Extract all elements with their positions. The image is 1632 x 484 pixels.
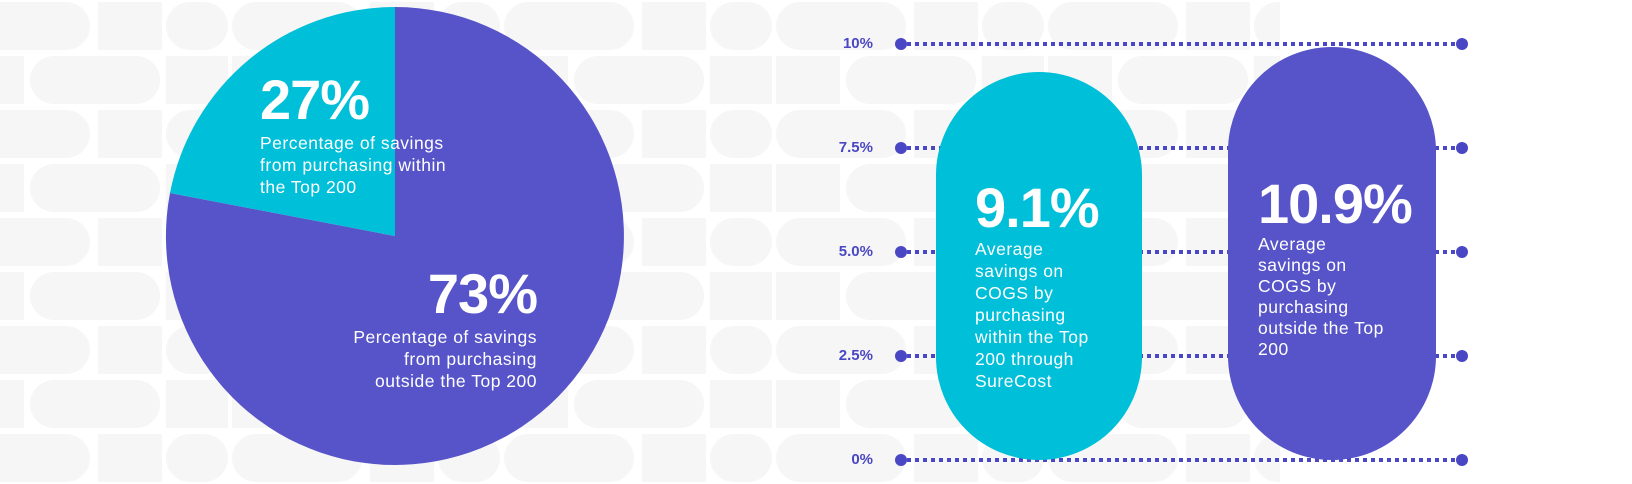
axis labels: 0%	[851, 451, 873, 468]
axis labels: 5.0%	[839, 243, 873, 260]
bar: 10.9%: Average	[1258, 234, 1326, 254]
bar: 9.1%: within the Top	[975, 327, 1089, 347]
bar: 10.9%: savings on	[1258, 255, 1347, 275]
axis labels: 10%	[843, 35, 873, 52]
bar: 9.1%: SureCost	[975, 371, 1052, 391]
pie label 73%	[353, 262, 537, 391]
pie label 27%: 27%	[260, 68, 369, 131]
bar: 10.9%	[1228, 47, 1436, 460]
pie label 73%: 73%	[428, 262, 537, 325]
bar: 9.1%: Average	[975, 239, 1043, 259]
pie label 73%: Percentage of savings	[353, 327, 537, 347]
bar: 9.1%: purchasing	[975, 305, 1066, 325]
bar: 9.1%: savings on	[975, 261, 1064, 281]
pie slice: 73%	[166, 7, 624, 465]
bar: 9.1%	[936, 72, 1142, 460]
pie label 27%: from purchasing within	[260, 155, 446, 175]
pie label 73%: outside the Top 200	[375, 371, 537, 391]
bar: 10.9%: outside the Top	[1258, 318, 1384, 338]
pie slice: 27%	[170, 7, 395, 236]
bar: 9.1%: 200 through	[975, 349, 1074, 369]
axis labels: 2.5%	[839, 347, 873, 364]
pie label 73%: from purchasing	[404, 349, 537, 369]
bar: 10.9%: purchasing	[1258, 297, 1349, 317]
pie label 27%	[260, 68, 446, 197]
pie label 27%: Percentage of savings	[260, 133, 444, 153]
bar: 9.1%: 9.1%	[975, 176, 1099, 239]
pie chart	[166, 7, 624, 465]
pie label 27%: the Top 200	[260, 177, 357, 197]
bar: 10.9%: 10.9%	[1258, 172, 1412, 235]
bar: 10.9%: 200	[1258, 339, 1289, 359]
bar: 9.1%: COGS by	[975, 283, 1053, 303]
axis labels	[839, 35, 873, 468]
bar: 10.9%: COGS by	[1258, 276, 1336, 296]
axis labels: 7.5%	[839, 139, 873, 156]
